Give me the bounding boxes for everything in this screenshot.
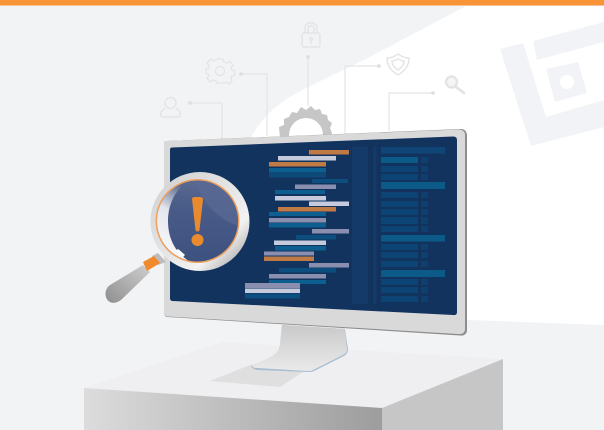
table top [84, 342, 503, 408]
right column rows [381, 147, 445, 302]
magnifier neck [152, 253, 166, 265]
monitor screen [170, 136, 457, 315]
monitor bezel [164, 129, 467, 336]
top orange bar [0, 0, 604, 6]
connector: user [188, 101, 222, 139]
logo watermark [500, 22, 604, 146]
icon: user [161, 98, 180, 117]
connector lines and icons [161, 23, 464, 139]
table [84, 342, 503, 430]
magnifying glass [106, 172, 250, 303]
stand shadow [210, 365, 303, 387]
code bars [245, 150, 349, 298]
icon: padlock [302, 23, 320, 47]
magnifier lens [157, 180, 238, 262]
connector: padlock [306, 55, 310, 106]
icon: shield [387, 54, 409, 75]
lens highlight wedge [195, 180, 240, 226]
middle code columns [352, 147, 376, 304]
magnifier handle [106, 265, 150, 303]
icon: search [446, 76, 464, 93]
connector: shield [345, 64, 381, 134]
magnifier collar [143, 256, 160, 271]
connector: search [389, 91, 435, 131]
icon: gear [206, 59, 235, 84]
lens white crescent [157, 186, 188, 260]
table right face [382, 359, 503, 430]
connector: gear [239, 72, 267, 136]
monitor [164, 129, 467, 336]
monitor stand [251, 325, 348, 372]
lens glint [177, 250, 184, 256]
magnifier rim [150, 172, 250, 271]
table front face [84, 388, 382, 430]
gear behind monitor [279, 106, 332, 152]
icon: exclamation mark [192, 197, 204, 246]
